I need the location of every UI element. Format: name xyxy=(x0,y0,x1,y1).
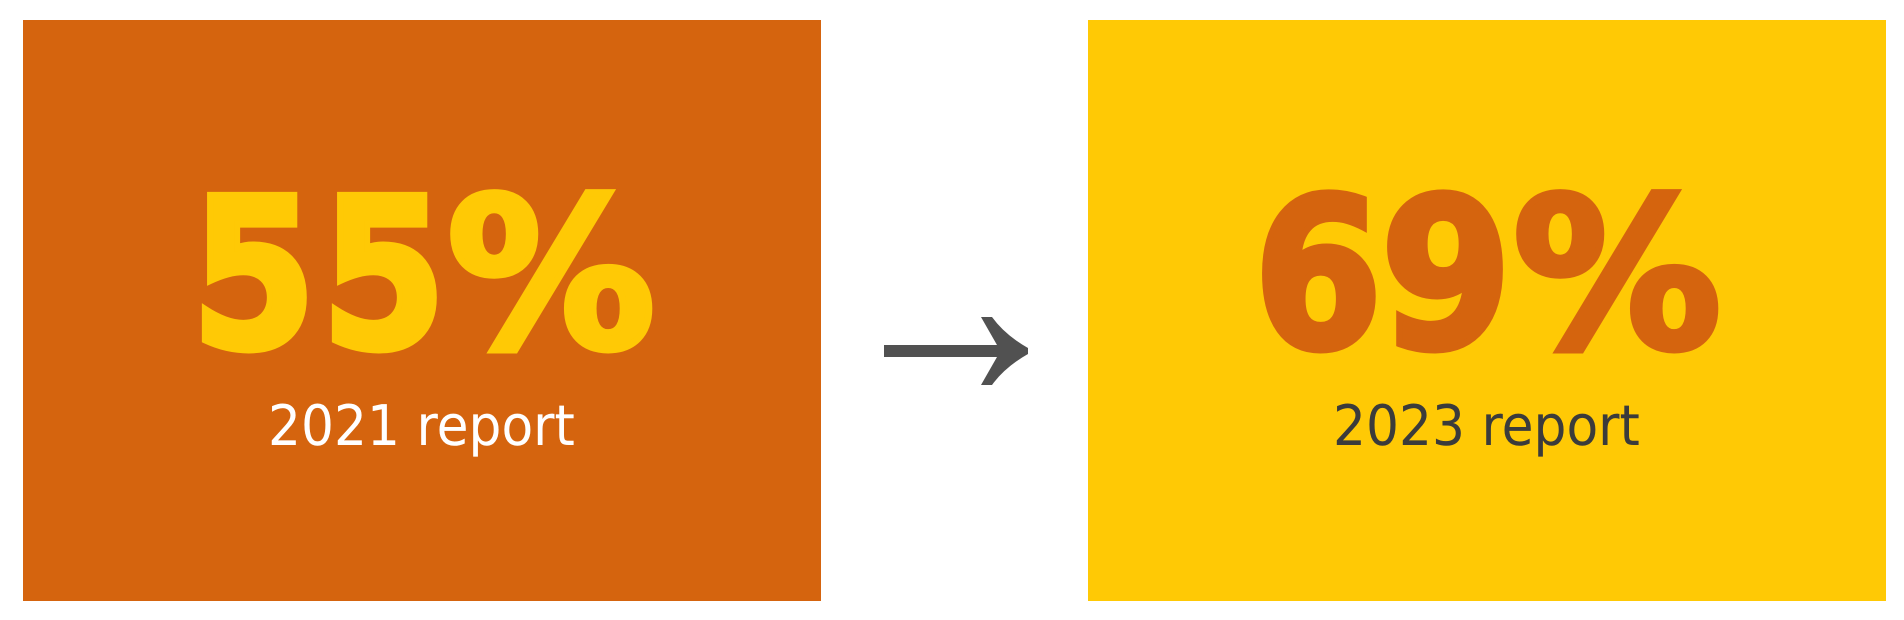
heading: 69%: 9 xyxy=(1380,155,1512,397)
heading: 55%: 5 xyxy=(321,155,446,397)
heading: 55% xyxy=(191,155,655,397)
text: 2023 report: 2023 report xyxy=(1333,394,1640,459)
heading: 55%: % xyxy=(447,155,655,397)
heading: 69% xyxy=(1254,155,1721,397)
heading: 69%: % xyxy=(1513,155,1721,397)
text: 2021 report: 2021 report xyxy=(268,394,575,459)
panel: 2023 report xyxy=(1088,20,1886,601)
heading: 69%: 6 xyxy=(1254,155,1383,397)
panel: 2021 report xyxy=(23,20,821,601)
arrow xyxy=(884,317,1028,385)
heading: 55%: 5 xyxy=(191,155,316,397)
